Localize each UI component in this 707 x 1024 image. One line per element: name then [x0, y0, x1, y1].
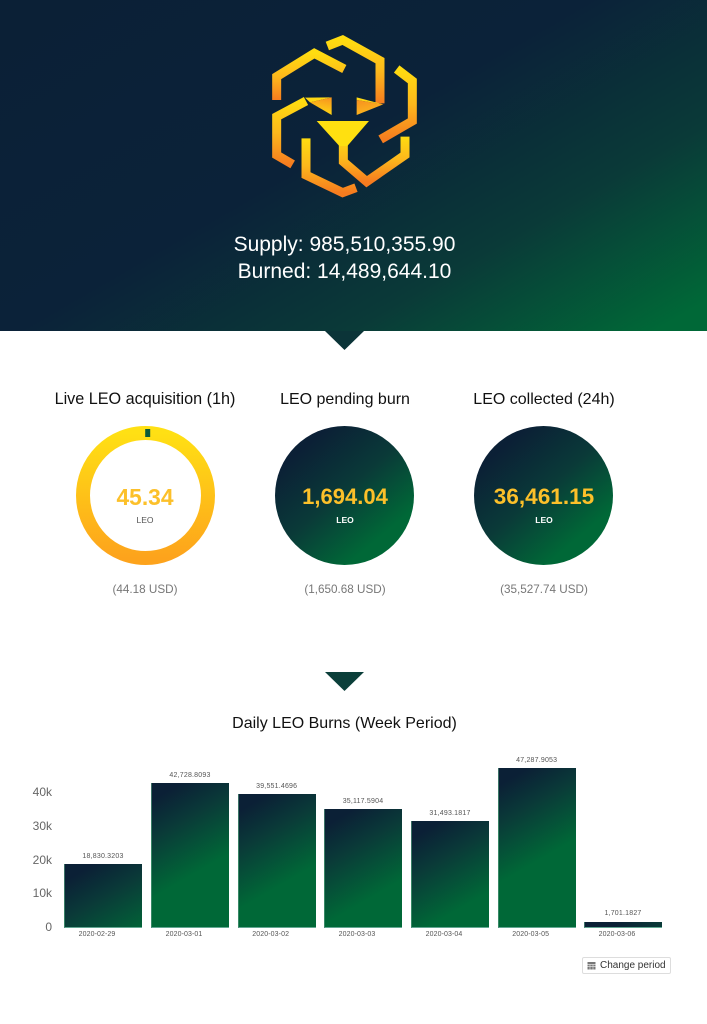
- chart heading: Daily LEO Burns (Week Period): [232, 715, 457, 732]
- bar: 2020-03-03: 2020-03-03: [339, 931, 375, 938]
- bar: 2020-03-05: 47,287.9053: [516, 757, 557, 764]
- bar: 2020-03-06: 1,701.1827: [604, 910, 642, 917]
- supply and burned text: Burned: 14,489,644.10: [238, 260, 451, 283]
- bar: 2020-03-05: [498, 757, 576, 938]
- bar: 2020-03-01: 42,728.8093: [169, 772, 211, 779]
- bar: 2020-03-03: [324, 798, 402, 938]
- header panel: [0, 0, 707, 331]
- bar: 2020-03-04: 31,493.1817: [429, 810, 471, 817]
- unit: LEO: [336, 515, 354, 525]
- icon: LEO lion logo: [272, 35, 417, 198]
- bar: 2020-03-04: [411, 810, 489, 938]
- bar: 2020-02-29: 18,830.3203: [82, 853, 124, 860]
- heading: Live LEO acquisition (1h): [55, 390, 235, 408]
- donut gauge: [76, 426, 215, 565]
- arrow: section pointer: [325, 672, 364, 691]
- circle: [275, 426, 414, 565]
- y axis labels: 30k: [33, 819, 52, 833]
- unit: LEO: [535, 515, 553, 525]
- icon: calendar: [588, 962, 596, 970]
- y axis labels: 20k: [33, 853, 52, 867]
- bar: 2020-02-29: 2020-02-29: [79, 931, 115, 938]
- y axis labels: 0: [45, 920, 52, 934]
- value: 36,461.15: [494, 484, 594, 509]
- panel: pending burn: [275, 391, 414, 596]
- usd value: (35,527.74 USD): [500, 583, 588, 596]
- y axis labels: 10k: [33, 886, 52, 900]
- arrow: header pointer: [325, 331, 364, 350]
- circle: [474, 426, 613, 565]
- bar: 2020-03-06: [584, 910, 662, 938]
- supply and burned text: Supply: 985,510,355.90: [234, 233, 455, 256]
- panel: live acquisition: [55, 390, 235, 596]
- bar: 2020-03-05: 2020-03-05: [512, 931, 549, 938]
- usd value: (1,650.68 USD): [304, 583, 386, 596]
- value: 45.34: [116, 484, 174, 510]
- bar: 2020-03-04: 2020-03-04: [426, 931, 462, 938]
- button label: Change period: [600, 960, 666, 971]
- unit: LEO: [136, 515, 154, 525]
- supply and burned text: [234, 233, 455, 283]
- heading: LEO collected (24h): [473, 391, 615, 408]
- bar: 2020-03-01: 2020-03-01: [166, 931, 202, 938]
- value: 1,694.04: [302, 484, 388, 509]
- usd value: (44.18 USD): [113, 583, 177, 596]
- panel: collected: [473, 391, 615, 596]
- bar: 2020-03-02: 39,551.4696: [256, 783, 297, 790]
- bar: 2020-03-02: [238, 783, 316, 938]
- bar: 2020-03-06: 2020-03-06: [599, 931, 635, 938]
- button: change period: [582, 957, 671, 974]
- bar: 2020-03-03: 35,117.5904: [343, 798, 383, 805]
- bar: 2020-03-02: 2020-03-02: [252, 931, 289, 938]
- bar: 2020-02-29: [64, 853, 142, 938]
- heading: LEO pending burn: [280, 391, 410, 408]
- bar: 2020-03-01: [151, 772, 229, 938]
- bar chart: [32, 757, 662, 938]
- y axis labels: 40k: [33, 785, 52, 799]
- y axis labels: [32, 785, 52, 934]
